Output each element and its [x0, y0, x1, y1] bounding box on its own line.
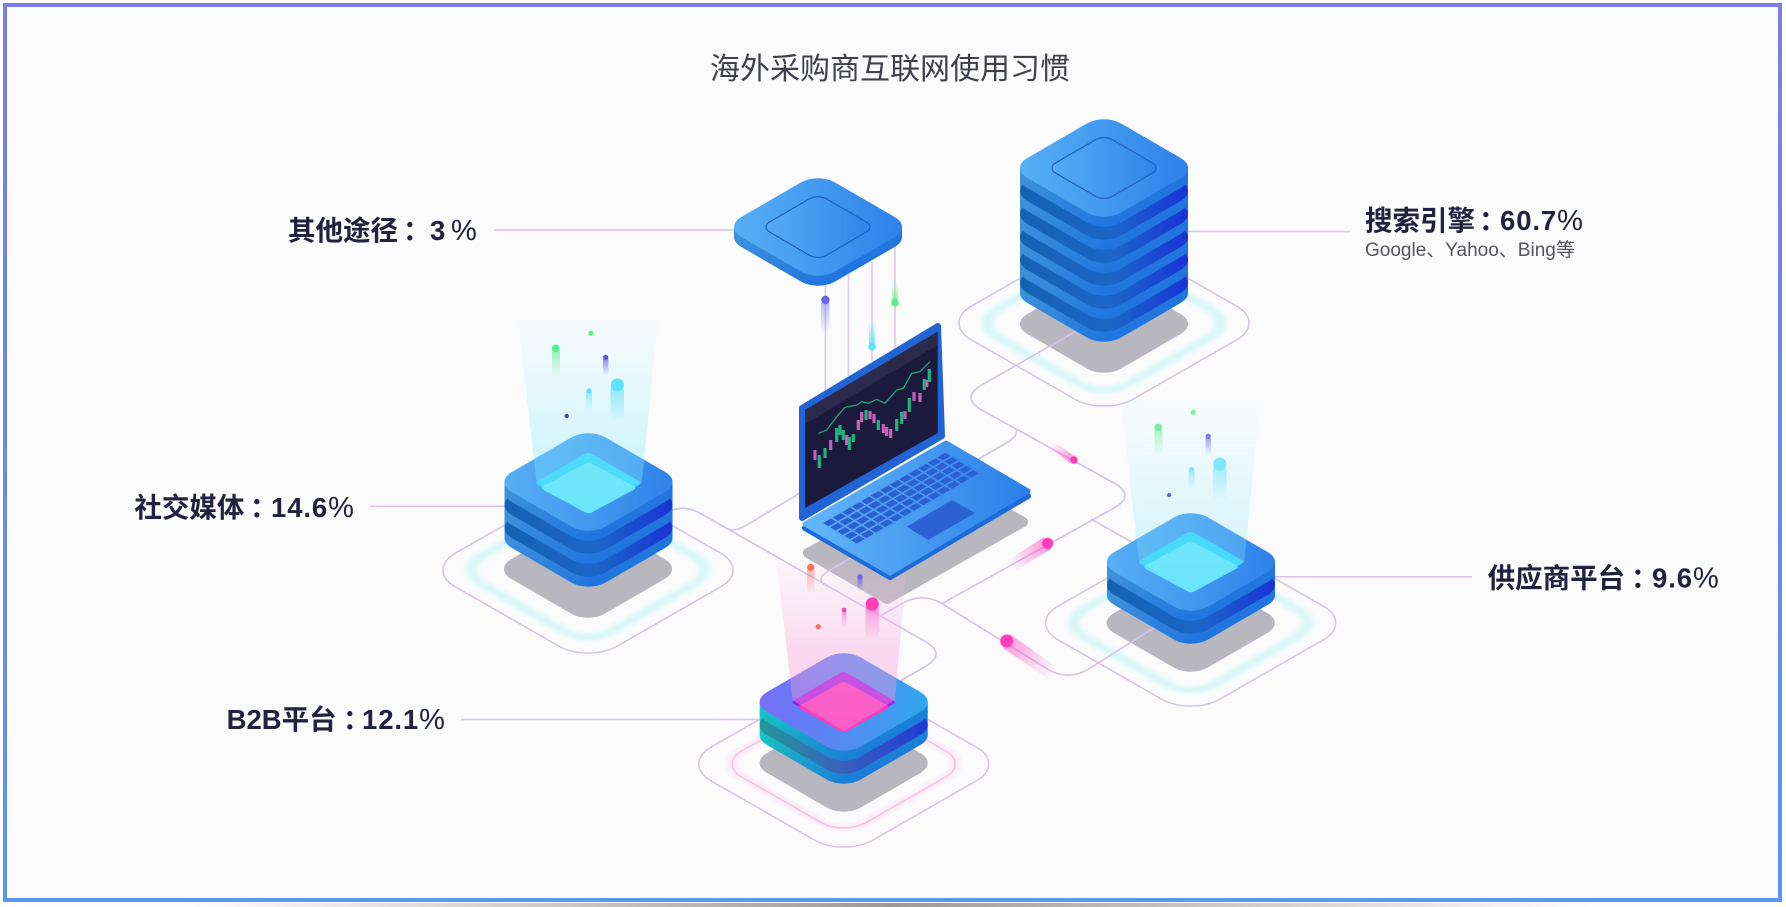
platform: search engine base — [942, 230, 1266, 416]
platform: supplier base — [1029, 530, 1353, 716]
label: B2B platforms: B2B — [227, 704, 282, 735]
label: search engines: ： — [1479, 198, 1506, 238]
label: social media: 14.6 — [271, 492, 328, 523]
label: other channels: 其他途径 — [288, 208, 398, 248]
label: B2B platforms: ： — [343, 697, 370, 737]
laptop shadow — [808, 477, 1023, 599]
light beam and particles: social media — [518, 320, 658, 513]
label: supplier platforms: % — [1693, 562, 1719, 594]
laptop base edge — [805, 445, 1028, 577]
label: supplier platforms: 供应商平台 — [1488, 556, 1625, 596]
light beam and particles: B2B platforms — [777, 563, 907, 731]
server stack: supplier platforms — [1097, 508, 1285, 649]
label: social media: 社交媒体 — [134, 485, 245, 525]
sublabel: search engine examples: Google、Yahoo、Bing等 — [1365, 239, 1575, 261]
label: supplier platforms: ： — [1631, 556, 1658, 596]
title: 海外采购商互联网使用习惯 — [710, 44, 1070, 88]
server: other channels — [724, 173, 912, 291]
laptop — [802, 326, 1028, 577]
label: search engines: 60.7 — [1500, 205, 1557, 236]
touchpad — [907, 500, 975, 540]
label: B2B platforms: % — [419, 704, 445, 736]
laptop base deck — [805, 443, 1028, 573]
label: other channels: 3 — [430, 215, 445, 246]
leader line: social media — [370, 505, 506, 507]
label: B2B platforms: 平台 — [282, 697, 337, 737]
server stack: social media — [495, 428, 682, 592]
label: search engines: 搜索引擎 — [1365, 198, 1475, 238]
keyboard — [823, 452, 982, 545]
platform: B2B base — [682, 671, 1006, 857]
label: search engines: % — [1557, 205, 1583, 237]
comets on link lines — [821, 282, 899, 351]
network connection lines — [660, 326, 1160, 684]
comets on network lines — [1000, 442, 1078, 678]
label: B2B platforms: 12.1 — [362, 704, 419, 735]
server stack: search engines — [1010, 114, 1198, 347]
label: social media: ： — [250, 485, 278, 525]
label: other channels: % — [451, 215, 477, 247]
leader line: other channels — [494, 229, 735, 231]
leader line: B2B platforms — [461, 718, 762, 720]
laptop screen panel — [805, 332, 938, 508]
platform: social media base — [426, 477, 750, 663]
candlesticks — [815, 369, 929, 468]
server stack: B2B platforms — [750, 648, 938, 789]
label: supplier platforms: 9.6 — [1652, 562, 1693, 594]
label: other channels: ： — [403, 208, 430, 248]
leader line: supplier platforms — [1273, 576, 1472, 578]
stock chart line — [818, 362, 930, 433]
laptop screen lid — [802, 326, 942, 518]
light beam and particles: supplier platforms — [1120, 399, 1260, 592]
vertical link lines from small server to laptop — [825, 240, 895, 390]
label: social media: % — [328, 492, 354, 524]
leader line: search engines — [1186, 230, 1350, 232]
